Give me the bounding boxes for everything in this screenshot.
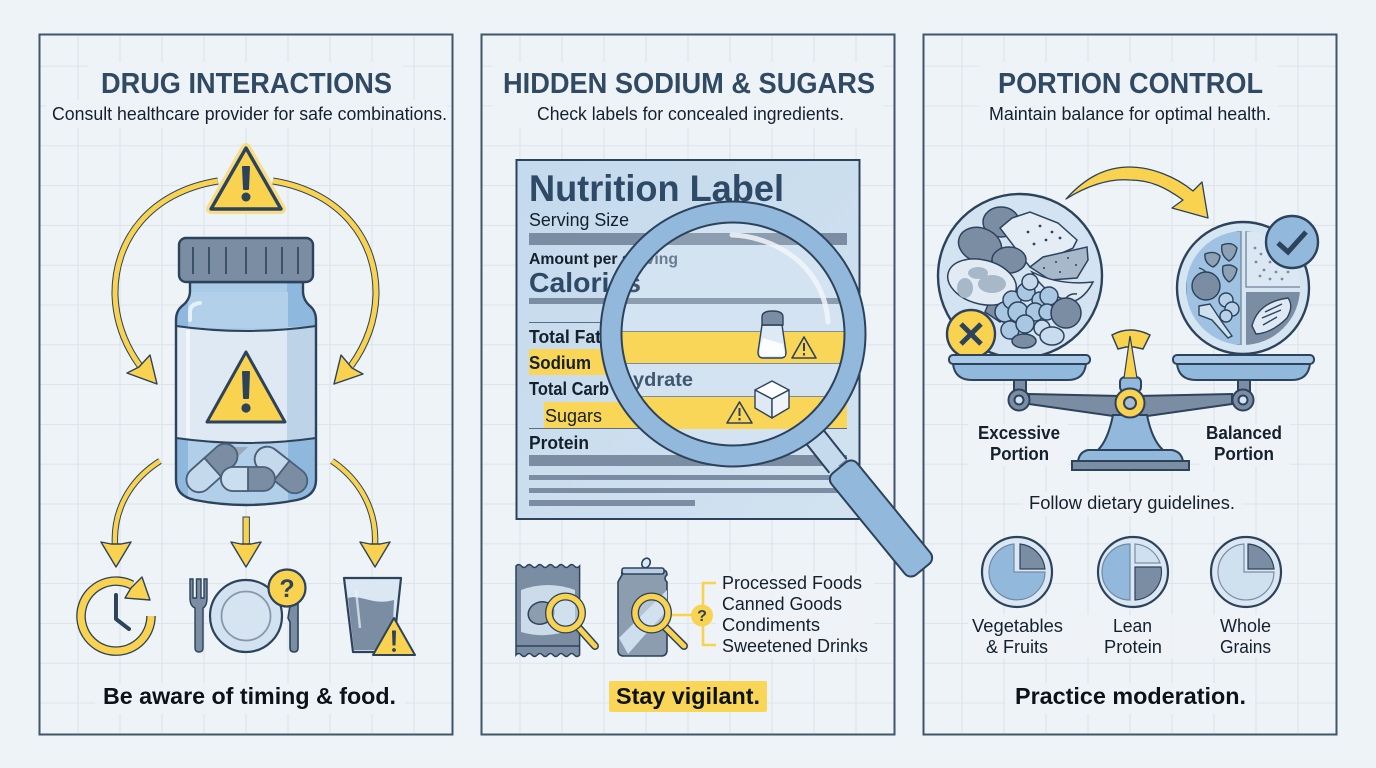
label: balanced portion: Balanced (1206, 423, 1282, 443)
magnifying glass (516, 212, 935, 712)
list: food types: Canned Goods (722, 594, 842, 614)
lens contents: Calories (529, 267, 641, 298)
arrow: bottle to food (231, 517, 261, 567)
subtitle: consult provider: Consult healthcare provider for safe combinations. (52, 104, 447, 124)
icon: vegetables and fruits pie (982, 537, 1052, 607)
subtitle: maintain balance: Maintain balance for optimal health. (989, 104, 1271, 124)
nutrition label: Sugars (545, 406, 602, 426)
label warning triangle (207, 352, 285, 422)
label: lean protein: Lean (1113, 616, 1152, 636)
callout: food list bracket: ? (697, 608, 707, 625)
subtitle: check labels: Check labels for concealed ingredients. (537, 104, 844, 124)
nutrition label: Nutrition Label (529, 168, 784, 209)
nutrition label (516, 160, 860, 519)
label: balanced portion (1206, 423, 1282, 464)
icon: salt shaker (758, 311, 786, 358)
capsules (181, 439, 312, 498)
nutrition label: Amount per serving (529, 251, 678, 268)
nutrition label: Serving Size (529, 210, 629, 230)
label: excessive portion (978, 423, 1060, 464)
arrow: excessive to balanced (1066, 167, 1208, 218)
label: excessive portion: Excessive (978, 423, 1060, 443)
nutrition label: Sodium (529, 353, 591, 373)
heading: portion control: PORTION CONTROL (998, 68, 1263, 100)
callout: food list bracket (672, 583, 716, 645)
list: food types: Sweetened Drinks (722, 636, 868, 656)
label: lean protein (1104, 616, 1162, 657)
nutrition label: Total Carb (529, 379, 609, 399)
arrow: bottle to drink (332, 461, 390, 567)
icon: glass with warning (344, 578, 415, 655)
footer: stay vigilant: Stay vigilant. (616, 683, 760, 709)
icon: check badge (1266, 216, 1318, 268)
footer: be aware: Be aware of timing & food. (103, 683, 396, 709)
panel: hidden sodium and sugars (482, 34, 935, 734)
arrow: top warning to right of bottle (273, 181, 376, 384)
label: vegetables and fruits: & Fruits (986, 637, 1048, 657)
icon: snack bag (516, 564, 580, 656)
nutrition label: Protein (529, 433, 589, 453)
text: follow dietary guidelines: Follow dietary guidelines. (1029, 493, 1235, 513)
bottle cap (179, 238, 313, 282)
list: food types (722, 573, 868, 656)
label: whole grains (1220, 616, 1271, 657)
label: lean protein: Protein (1104, 637, 1162, 657)
lens ring (611, 212, 855, 456)
icon: fork, plate and knife (190, 570, 306, 652)
footer: practice moderation: Practice moderation. (1015, 683, 1246, 709)
heading: hidden sodium and sugars: HIDDEN SODIUM & SUGARS (503, 68, 875, 100)
label: excessive portion: Portion (990, 444, 1049, 464)
icon: pill bottle (176, 238, 317, 512)
nutrition label: Total Fat (529, 327, 601, 347)
lens contents: ydrate (633, 370, 693, 391)
heading: drug interactions: DRUG INTERACTIONS (101, 68, 392, 100)
icon: lean protein pie (1098, 537, 1168, 607)
icon: small warning sugar (727, 402, 752, 423)
label: whole grains: Whole (1220, 616, 1271, 636)
icon: balanced plate (1177, 222, 1309, 354)
handle (815, 437, 935, 580)
icon: can (618, 557, 667, 656)
label: whole grains: Grains (1220, 637, 1271, 657)
arrow: bottle to timing (101, 461, 160, 567)
lens contents: Amount per serving (529, 251, 678, 268)
arrow: top warning to left of bottle (115, 181, 218, 384)
icon: clock (81, 577, 151, 651)
icon: x badge (947, 310, 995, 358)
label: vegetables and fruits: Vegetables (972, 616, 1063, 636)
nutrition label: Calories (529, 267, 641, 298)
icon: magnifier on can (635, 596, 684, 646)
lens contents (622, 224, 844, 429)
icon: fork, plate and knife: ? (279, 575, 295, 603)
label: balanced portion: Portion (1214, 444, 1274, 464)
icon: magnifier on bag (549, 596, 595, 646)
panel: drug interactions (40, 34, 452, 734)
icon: sugar cube (755, 381, 789, 418)
list: food types: Processed Foods (722, 573, 862, 593)
panel: portion control (924, 34, 1336, 734)
label: vegetables and fruits (972, 616, 1063, 657)
icon: top warning triangle (211, 148, 281, 209)
list: food types: Condiments (722, 615, 820, 635)
icon: balance scale (949, 330, 1314, 470)
icon: small warning sodium (792, 337, 816, 358)
icon: overfilled plate (938, 194, 1102, 358)
icon: whole grains pie (1211, 537, 1281, 607)
